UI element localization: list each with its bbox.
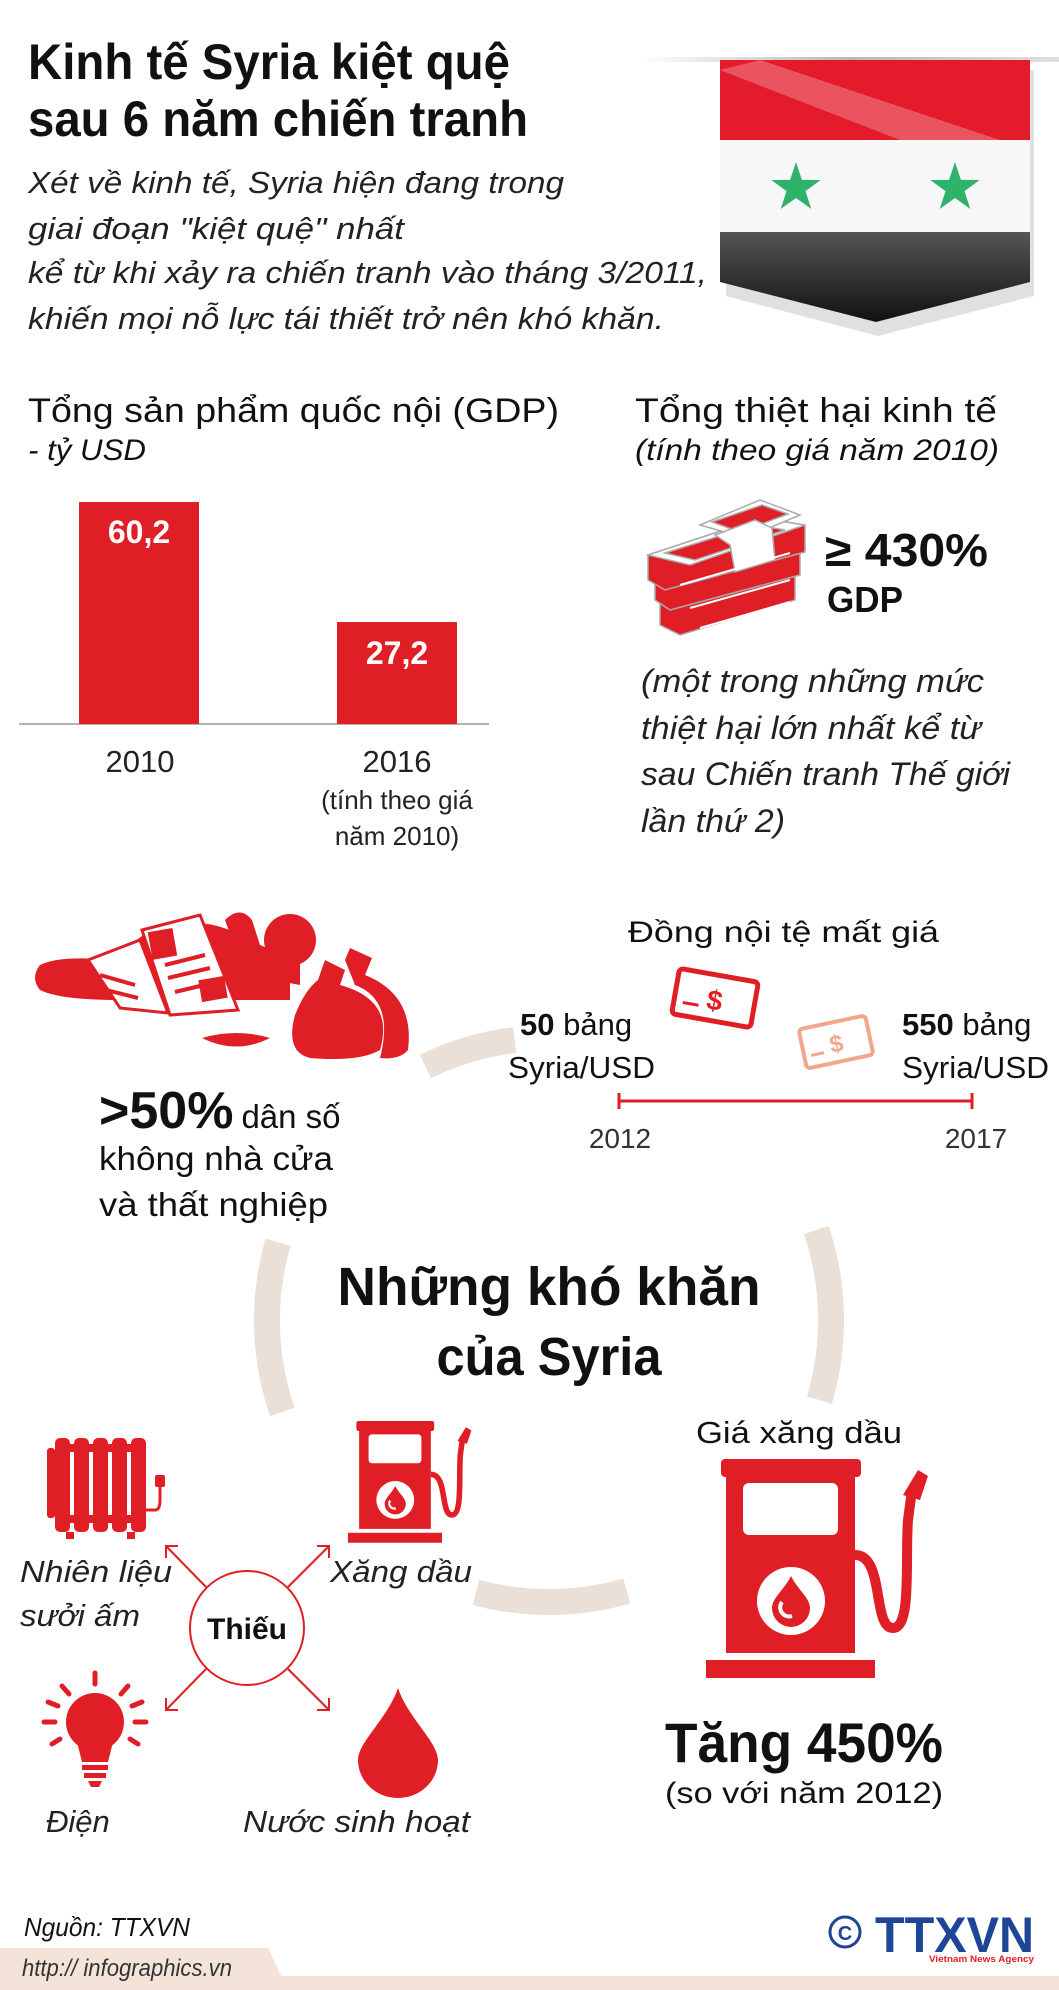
heading: Syria's difficulties: Những khó khăn: [338, 1257, 760, 1317]
heading: currency devaluation: Đồng nội tệ mất giá: [628, 916, 939, 949]
GDP heading: [28, 392, 559, 467]
GDP heading: Tổng sản phẩm quốc nội (GDP): [28, 392, 559, 430]
icon: banknote faded: [799, 1015, 873, 1069]
timeline: exchange rate: Syria/USD: [902, 1050, 1049, 1085]
label: water: Nước sinh hoạt: [243, 1804, 471, 1839]
timeline: exchange rate: 550 bảng: [902, 1007, 1031, 1042]
bar chart: GDP: năm 2010): [335, 821, 459, 851]
text block: loss note: thiệt hại lớn nhất kể từ: [641, 710, 984, 746]
icon: banknote faded: $: [827, 1030, 846, 1059]
icon: light bulb: [44, 1673, 146, 1787]
footer: website band: [0, 1948, 1059, 1990]
label: heating fuel: sưởi ấm: [20, 1598, 140, 1633]
heading: total economic loss: (tính theo giá năm 2010): [635, 434, 999, 467]
icon: banknote red: $: [704, 984, 725, 1017]
logo: TTXVN: TTXVN: [875, 1907, 1034, 1963]
footer: website band: http:// infographics.vn: [22, 1955, 232, 1982]
stat: fuel price increase: (so với năm 2012): [665, 1777, 943, 1810]
timeline: exchange rate: [508, 1007, 1049, 1154]
icon: banknote red: [672, 968, 758, 1028]
text block: loss note: [641, 663, 1011, 839]
subtitle text: khiến mọi nỗ lực tái thiết trở nên khó khăn.: [28, 301, 664, 336]
label: heating fuel: [20, 1554, 172, 1633]
label: heating fuel: Nhiên liệu: [20, 1554, 172, 1589]
footer: source: Nguồn: TTXVN: [24, 1912, 190, 1942]
bar chart: GDP: (tính theo giá: [321, 785, 473, 815]
subtitle text: [27, 165, 707, 336]
timeline: exchange rate: 2012: [589, 1123, 651, 1154]
logo: TTXVN: C: [838, 1923, 852, 1945]
stat: homeless and unemployed: và thất nghiệp: [99, 1186, 328, 1223]
timeline: exchange rate: 50 bảng: [520, 1007, 632, 1042]
title: sau 6 năm chiến tranh: [28, 91, 528, 147]
ring: difficulties circle: [267, 1040, 831, 1602]
icon: shortage circle with arrows: Thiếu: [207, 1613, 287, 1646]
text block: loss note: lần thứ 2): [641, 803, 785, 839]
timeline: exchange rate: 2017: [945, 1123, 1007, 1154]
bar chart: GDP: 2010: [106, 744, 174, 779]
stat: homeless and unemployed: >50%dân số: [99, 1082, 341, 1140]
icon: Syrian flag: [640, 57, 1059, 336]
timeline: exchange rate: Syria/USD: [508, 1050, 655, 1085]
subtitle text: Xét về kinh tế, Syria hiện đang trong: [27, 165, 564, 200]
icon: small fuel pump: [348, 1421, 471, 1543]
bar chart: GDP: 27,2: [366, 635, 428, 671]
icon: large fuel pump: [706, 1459, 928, 1678]
GDP heading: - tỷ USD: [28, 434, 146, 467]
title: Kinh tế Syria kiệt quệ: [28, 34, 510, 90]
stat: fuel price increase: [665, 1711, 943, 1810]
icon: water drop: [358, 1688, 438, 1798]
stat: homeless and unemployed: không nhà cửa: [99, 1140, 334, 1177]
icon: radiator: [47, 1438, 165, 1539]
bar chart: GDP: [19, 502, 489, 851]
label: fuel price: Giá xăng dầu: [696, 1415, 902, 1450]
icon: shortage circle with arrows: [166, 1546, 329, 1710]
subtitle text: kể từ khi xảy ra chiến tranh vào tháng 3/2011,: [28, 255, 707, 290]
stat: fuel price increase: Tăng 450%: [665, 1711, 943, 1774]
stat: 430% GDP: ≥ 430%: [825, 524, 988, 576]
title: [28, 34, 528, 147]
text block: loss note: sau Chiến tranh Thế giới: [641, 756, 1011, 792]
heading: Syria's difficulties: của Syria: [436, 1327, 662, 1387]
text block: loss note: (một trong những mức: [641, 663, 984, 699]
subtitle text: giai đoạn "kiệt quệ" nhất: [28, 211, 406, 246]
stat: homeless and unemployed: [99, 1082, 341, 1223]
icon: money stack: [648, 500, 805, 635]
stat: 430% GDP: [825, 524, 988, 620]
logo: TTXVN: Vietnam News Agency: [929, 1954, 1034, 1964]
icon: homeless person: [35, 912, 409, 1059]
bar chart: GDP: 60,2: [108, 514, 170, 550]
stat: 430% GDP: GDP: [827, 579, 903, 620]
label: electricity: Điện: [46, 1804, 110, 1839]
bar chart: GDP: 2016: [363, 744, 431, 779]
heading: total economic loss: [635, 392, 999, 467]
label: fuel: Xăng dầu: [329, 1554, 472, 1589]
heading: Syria's difficulties: [338, 1257, 760, 1387]
heading: total economic loss: Tổng thiệt hại kinh tế: [635, 392, 997, 430]
